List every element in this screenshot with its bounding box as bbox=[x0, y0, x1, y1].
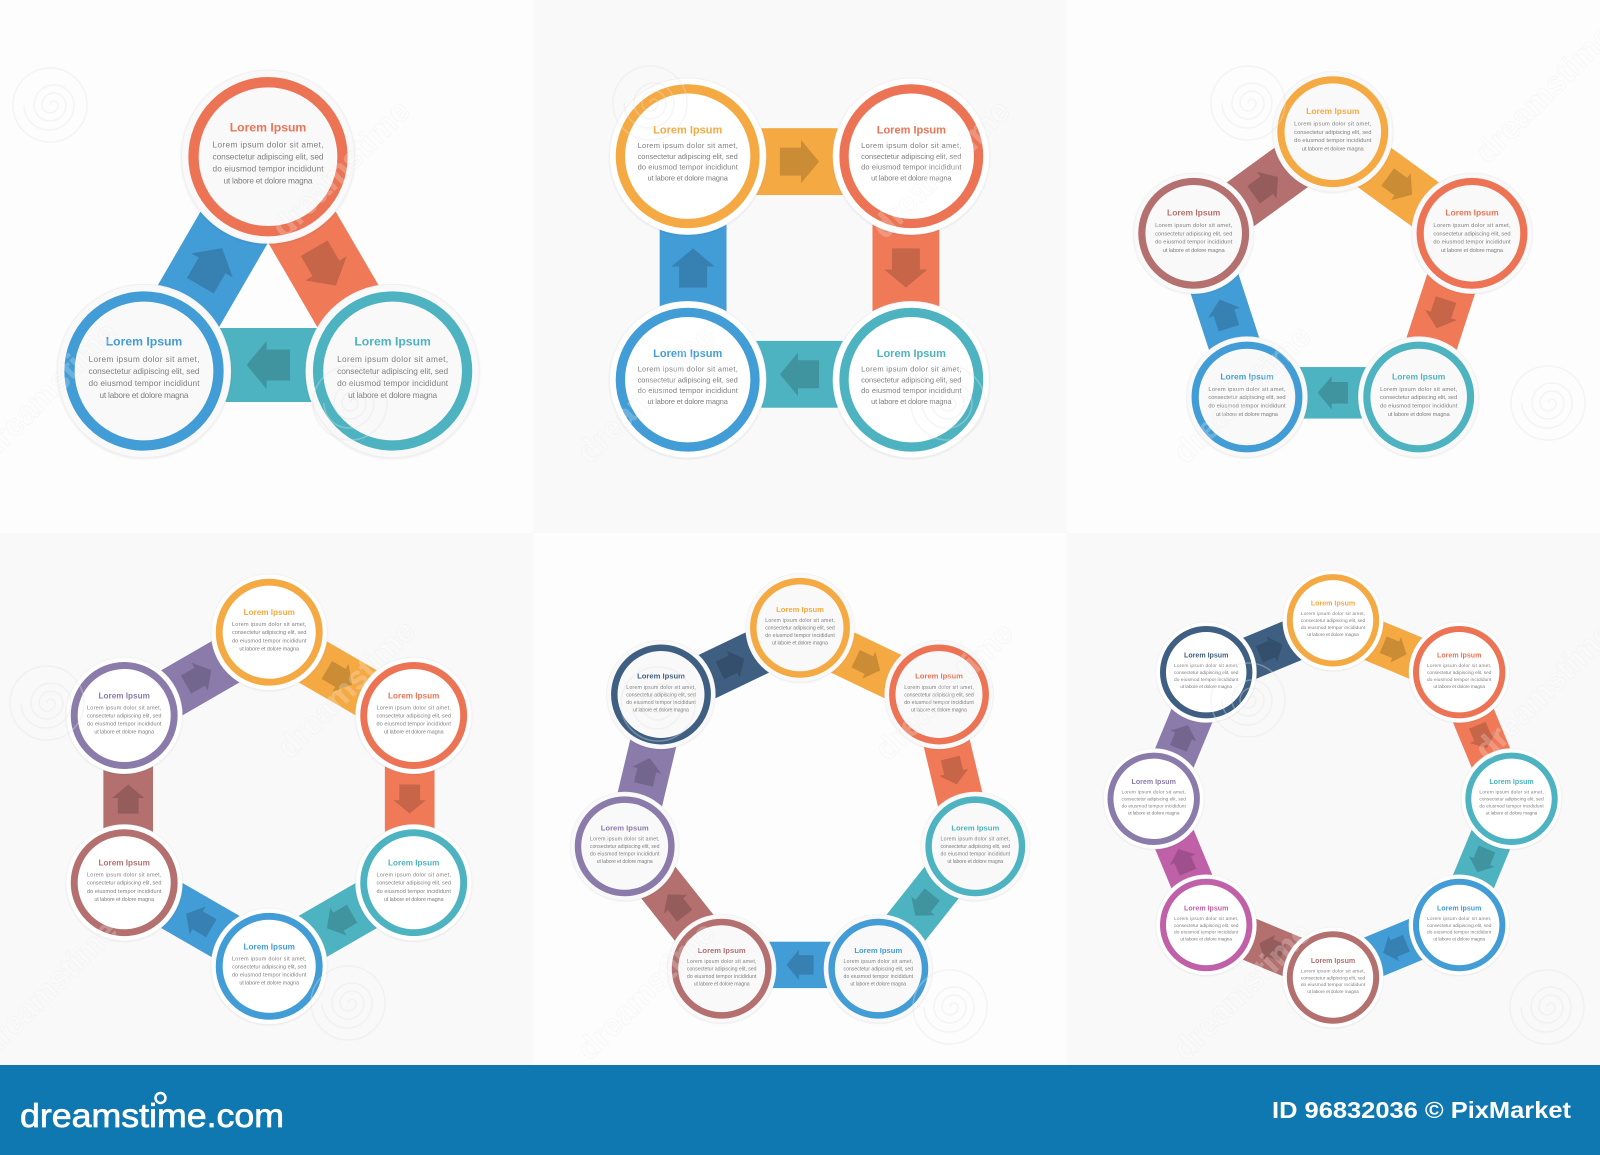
connector: purple band and arrow bbox=[143, 631, 255, 724]
step circle: red: Lorem ipsum dolor sit amet, bbox=[376, 705, 451, 711]
step circle: blue left: consectetur adipiscing elit, sed bbox=[88, 366, 200, 376]
step circle: red top: consectetur adipiscing elit, sed bbox=[212, 152, 324, 162]
connector: blue band and arrow bbox=[660, 200, 727, 336]
step circle: navy: Lorem Ipsum bbox=[637, 672, 685, 681]
step circle: magenta bbox=[1156, 875, 1256, 975]
step circle: orange: consectetur adipiscing elit, sed bbox=[232, 630, 306, 636]
connector: blue band and arrow bbox=[143, 874, 255, 968]
step circle: blue: do eiusmod tempor incididunt bbox=[232, 972, 307, 978]
connector: purple band and arrow bbox=[613, 720, 680, 822]
step circle: red: ut labore et dolore magna bbox=[871, 174, 952, 183]
step circle: blue: Lorem ipsum dolor sit amet, bbox=[232, 956, 307, 962]
step circle: purple bbox=[570, 792, 679, 901]
step circle: teal right: Lorem ipsum dolor sit amet, bbox=[337, 354, 448, 364]
watermark overlay: spirals and diagonal wordmarks: dreamstime bbox=[867, 614, 1020, 767]
step circle: orange: ut labore et dolore magna bbox=[239, 646, 300, 652]
step circle: mauve: Lorem ipsum dolor sit amet, bbox=[1155, 223, 1233, 229]
step circle: purple: Lorem ipsum dolor sit amet, bbox=[590, 837, 659, 843]
step circle: blue: ut labore et dolore magna bbox=[648, 397, 729, 406]
step circle: mauve: ut labore et dolore magna bbox=[1307, 989, 1359, 995]
step circle: teal: Lorem ipsum dolor sit amet, bbox=[376, 873, 451, 879]
step circle: red bbox=[1412, 173, 1532, 294]
watermark overlay: spirals and diagonal wordmarks: dreamstime bbox=[1165, 914, 1318, 1067]
connector: mauve band and arrow bbox=[103, 749, 153, 849]
step circle: teal: do eiusmod tempor incididunt bbox=[941, 852, 1011, 858]
step circle: red: consectetur adipiscing elit, sed bbox=[904, 692, 974, 698]
step circle: purple: Lorem Ipsum bbox=[601, 823, 649, 832]
step circle: purple: consectetur adipiscing elit, sed bbox=[1122, 797, 1186, 803]
step circle: blue: Lorem Ipsum bbox=[653, 348, 722, 360]
step circle: purple: do eiusmod tempor incididunt bbox=[590, 852, 660, 858]
step circle: red: do eiusmod tempor incididunt bbox=[1433, 240, 1511, 246]
step circle: orange: do eiusmod tempor incididunt bbox=[765, 633, 835, 639]
step circle: magenta: Lorem ipsum dolor sit amet, bbox=[1174, 916, 1238, 922]
step circle: orange: do eiusmod tempor incididunt bbox=[1294, 138, 1372, 144]
step circle: teal right: do eiusmod tempor incididunt bbox=[337, 378, 449, 388]
step circle: teal: consectetur adipiscing elit, sed bbox=[941, 844, 1010, 850]
connector: orange band and arrow bbox=[1346, 613, 1443, 686]
step circle: teal: Lorem Ipsum bbox=[1392, 371, 1446, 381]
step circle: mauve: ut labore et dolore magna bbox=[94, 897, 155, 903]
step circle: teal: consectetur adipiscing elit, sed bbox=[1380, 395, 1457, 401]
panel: five-step cycle bbox=[1067, 0, 1600, 533]
connector: orange band and arrow bbox=[815, 623, 920, 706]
step circle: mauve bbox=[66, 825, 182, 941]
step circle: orange: Lorem ipsum dolor sit amet, bbox=[765, 618, 835, 624]
step circle: teal: consectetur adipiscing elit, sed bbox=[376, 881, 451, 887]
step circle: orange: Lorem Ipsum bbox=[244, 608, 295, 617]
connector: red band and arrow bbox=[872, 200, 939, 336]
step circle: orange: ut labore et dolore magna bbox=[1307, 632, 1359, 638]
connector: navy band and arrow bbox=[680, 623, 785, 706]
step circle: blue: ut labore et dolore magna bbox=[1216, 412, 1279, 418]
step circle: teal bbox=[1461, 749, 1562, 849]
footer credit: image ID and author: ID 96832036 © PixMarket bbox=[1272, 1097, 1571, 1123]
connector: red band and arrow bbox=[1446, 688, 1519, 785]
step circle: mauve: do eiusmod tempor incididunt bbox=[87, 889, 162, 895]
panel: eight-step cycle bbox=[1067, 533, 1600, 1065]
step circle: teal: ut labore et dolore magna bbox=[947, 859, 1003, 865]
step circle: blue bbox=[609, 301, 766, 458]
step circle: blue: do eiusmod tempor incididunt bbox=[1208, 403, 1286, 409]
step circle: purple: do eiusmod tempor incididunt bbox=[87, 722, 162, 728]
step circle: mauve bbox=[1133, 173, 1254, 294]
step circle: orange: consectetur adipiscing elit, sed bbox=[1301, 618, 1366, 624]
step circle: teal: ut labore et dolore magna bbox=[1486, 810, 1538, 816]
step circle: purple: consectetur adipiscing elit, sed bbox=[87, 714, 161, 720]
step circle: blue left: ut labore et dolore magna bbox=[100, 390, 189, 400]
step circle: red: ut labore et dolore magna bbox=[384, 730, 444, 736]
step circle: blue: Lorem ipsum dolor sit amet, bbox=[844, 959, 913, 965]
step circle: teal: consectetur adipiscing elit, sed bbox=[1479, 797, 1544, 803]
step circle: blue bbox=[824, 914, 933, 1023]
connector: teal band and arrow bbox=[1281, 367, 1385, 419]
watermark overlay: spirals and diagonal wordmarks: dreamstime bbox=[269, 612, 422, 765]
step circle: teal right bbox=[306, 284, 479, 458]
connector: blue band and arrow bbox=[1184, 256, 1265, 371]
step circle: mauve: ut labore et dolore magna bbox=[1163, 248, 1225, 254]
step circle: blue left bbox=[57, 284, 231, 458]
step circle: red top: Lorem ipsum dolor sit amet, bbox=[212, 140, 324, 150]
connector: purple band and arrow bbox=[1147, 688, 1220, 785]
step circle: teal: do eiusmod tempor incididunt bbox=[376, 889, 451, 895]
step circle: blue left: Lorem Ipsum bbox=[106, 335, 182, 349]
step circle: teal right: Lorem Ipsum bbox=[354, 335, 431, 349]
step circle: navy: do eiusmod tempor incididunt bbox=[1174, 677, 1239, 683]
connector: orange band and arrow bbox=[1343, 134, 1457, 237]
step circle: orange: ut labore et dolore magna bbox=[648, 174, 729, 183]
step circle: orange: Lorem Ipsum bbox=[776, 605, 824, 614]
step circle: teal: do eiusmod tempor incididunt bbox=[861, 386, 962, 395]
step circle: teal bbox=[356, 825, 472, 941]
step circle: blue: ut labore et dolore magna bbox=[239, 980, 300, 986]
step circle: purple: do eiusmod tempor incididunt bbox=[1122, 803, 1187, 809]
step circle: purple: ut labore et dolore magna bbox=[1128, 810, 1180, 816]
step circle: blue: ut labore et dolore magna bbox=[850, 982, 906, 988]
step circle: orange: do eiusmod tempor incididunt bbox=[638, 163, 739, 172]
step circle: teal right: ut labore et dolore magna bbox=[348, 390, 437, 400]
panel: seven-step cycle bbox=[533, 533, 1067, 1065]
step circle: teal: Lorem ipsum dolor sit amet, bbox=[1479, 790, 1544, 796]
step circle: navy: ut labore et dolore magna bbox=[1180, 684, 1232, 690]
connector: mauve band and arrow bbox=[1208, 134, 1323, 237]
step circle: red: do eiusmod tempor incididunt bbox=[376, 722, 451, 728]
step circle: mauve: Lorem Ipsum bbox=[99, 859, 150, 868]
step circle: navy: consectetur adipiscing elit, sed bbox=[1174, 670, 1239, 676]
step circle: mauve: do eiusmod tempor incididunt bbox=[687, 974, 757, 980]
step circle: orange: Lorem ipsum dolor sit amet, bbox=[638, 141, 738, 150]
step circle: red top: ut labore et dolore magna bbox=[224, 176, 313, 186]
step circle: orange bbox=[211, 574, 327, 690]
step circle: navy bbox=[607, 640, 715, 749]
step circle: purple bbox=[1103, 749, 1204, 849]
connector: mauve band and arrow bbox=[629, 854, 724, 956]
step circle: red: consectetur adipiscing elit, sed bbox=[376, 714, 451, 720]
step circle: orange: ut labore et dolore magna bbox=[1302, 146, 1365, 152]
step circle: purple: consectetur adipiscing elit, sed bbox=[590, 844, 660, 850]
connector: magenta band and arrow bbox=[1147, 812, 1220, 909]
step circle: red: do eiusmod tempor incididunt bbox=[861, 163, 962, 172]
step circle: mauve: consectetur adipiscing elit, sed bbox=[87, 881, 161, 887]
step circle: purple: Lorem Ipsum bbox=[99, 692, 150, 701]
step circle: mauve: Lorem ipsum dolor sit amet, bbox=[687, 959, 756, 965]
step circle: red: consectetur adipiscing elit, sed bbox=[1427, 670, 1492, 676]
step circle: red: Lorem Ipsum bbox=[877, 124, 946, 136]
step circle: teal: do eiusmod tempor incididunt bbox=[1380, 403, 1458, 409]
step circle: teal bbox=[921, 792, 1030, 901]
step circle: blue: ut labore et dolore magna bbox=[1433, 937, 1485, 943]
step circle: blue: Lorem ipsum dolor sit amet, bbox=[638, 365, 738, 374]
step circle: mauve: Lorem ipsum dolor sit amet, bbox=[1301, 968, 1365, 974]
step circle: red: consectetur adipiscing elit, sed bbox=[861, 152, 961, 161]
step circle: orange: ut labore et dolore magna bbox=[772, 641, 828, 647]
step circle: blue: consectetur adipiscing elit, sed bbox=[1208, 395, 1286, 401]
step circle: mauve: do eiusmod tempor incididunt bbox=[1301, 982, 1366, 988]
footer bar bbox=[0, 1065, 1600, 1155]
step circle: orange: Lorem Ipsum bbox=[653, 124, 722, 136]
step circle: mauve: do eiusmod tempor incididunt bbox=[1155, 240, 1233, 246]
step circle: red: Lorem ipsum dolor sit amet, bbox=[1427, 663, 1491, 669]
step circle: magenta: ut labore et dolore magna bbox=[1180, 937, 1232, 943]
connector: orange band and arrow bbox=[283, 631, 395, 724]
connector: red band and arrow bbox=[920, 720, 987, 822]
step circle: orange: do eiusmod tempor incididunt bbox=[232, 638, 307, 644]
panel: six-step cycle bbox=[0, 533, 533, 1065]
step circle: teal bbox=[833, 301, 990, 458]
step circle: orange bbox=[1273, 71, 1393, 192]
step circle: blue bbox=[1187, 337, 1307, 457]
step circle: mauve: Lorem Ipsum bbox=[698, 946, 746, 955]
step circle: teal: ut labore et dolore magna bbox=[871, 397, 952, 406]
step circle: blue: consectetur adipiscing elit, sed bbox=[232, 964, 306, 970]
step circle: orange: Lorem ipsum dolor sit amet, bbox=[232, 622, 307, 628]
step circle: blue bbox=[211, 908, 327, 1024]
step circle: teal bbox=[1358, 337, 1479, 457]
connector: red band and arrow bbox=[1401, 256, 1482, 371]
step circle: orange: Lorem Ipsum bbox=[1306, 106, 1360, 116]
step circle: blue: do eiusmod tempor incididunt bbox=[1427, 930, 1492, 936]
step circle: teal: Lorem Ipsum bbox=[877, 348, 946, 360]
step circle: blue: consectetur adipiscing elit, sed bbox=[638, 375, 738, 384]
step circle: navy: Lorem Ipsum bbox=[1184, 653, 1228, 660]
step circle: mauve: ut labore et dolore magna bbox=[694, 982, 750, 988]
step circle: blue: Lorem ipsum dolor sit amet, bbox=[1427, 916, 1491, 922]
step circle: orange bbox=[1283, 570, 1383, 671]
step circle: blue: Lorem Ipsum bbox=[854, 946, 902, 955]
footer logo: dreamstime.com: dreamstime.com bbox=[20, 1097, 284, 1134]
step circle: purple: Lorem ipsum dolor sit amet, bbox=[87, 705, 162, 711]
connector: teal band and arrow bbox=[193, 328, 343, 402]
step circle: red: ut labore et dolore magna bbox=[911, 707, 967, 713]
step circle: purple: Lorem Ipsum bbox=[1132, 779, 1176, 786]
step circle: red: Lorem Ipsum bbox=[1445, 208, 1499, 218]
step circle: orange bbox=[609, 78, 766, 234]
connector: blue band and arrow bbox=[753, 942, 847, 988]
connector: teal band and arrow bbox=[1446, 812, 1519, 909]
step circle: red: Lorem ipsum dolor sit amet, bbox=[904, 685, 974, 691]
step circle: red: do eiusmod tempor incididunt bbox=[1427, 677, 1492, 683]
step circle: red: Lorem Ipsum bbox=[388, 692, 439, 701]
step circle: red bbox=[885, 640, 993, 749]
step circle: teal: Lorem Ipsum bbox=[951, 823, 999, 832]
connector: blue band and arrow bbox=[142, 183, 281, 350]
step circle: orange: do eiusmod tempor incididunt bbox=[1301, 625, 1366, 631]
connector: teal band and arrow bbox=[283, 874, 395, 968]
step circle: red top bbox=[181, 70, 355, 243]
step circle: teal: consectetur adipiscing elit, sed bbox=[861, 375, 961, 384]
connector: blue band and arrow bbox=[1346, 912, 1443, 985]
step circle: purple: ut labore et dolore magna bbox=[597, 859, 653, 865]
step circle: blue: do eiusmod tempor incididunt bbox=[638, 386, 739, 395]
panel: four-step cycle bbox=[533, 0, 1067, 533]
step circle: red bbox=[356, 657, 472, 774]
connector: red band and arrow bbox=[385, 749, 435, 849]
step circle: blue: Lorem Ipsum bbox=[1437, 905, 1481, 912]
connector: red band and arrow bbox=[255, 183, 395, 350]
step circle: orange: Lorem ipsum dolor sit amet, bbox=[1294, 121, 1372, 127]
step circle: purple: Lorem ipsum dolor sit amet, bbox=[1122, 790, 1186, 796]
step circle: teal: Lorem ipsum dolor sit amet, bbox=[1380, 387, 1458, 393]
step circle: blue: Lorem ipsum dolor sit amet, bbox=[1208, 387, 1286, 393]
connector: mauve band and arrow bbox=[1222, 912, 1319, 985]
step circle: blue bbox=[1409, 875, 1509, 975]
step circle: teal: Lorem ipsum dolor sit amet, bbox=[941, 837, 1010, 843]
watermark overlay: spirals and diagonal wordmarks: dreamstime bbox=[569, 317, 722, 470]
step circle: teal: ut labore et dolore magna bbox=[384, 897, 444, 903]
step circle: mauve: consectetur adipiscing elit, sed bbox=[687, 967, 757, 973]
step circle: teal right: consectetur adipiscing elit, sed bbox=[337, 366, 448, 376]
step circle: blue: Lorem Ipsum bbox=[1220, 371, 1274, 381]
step circle: orange: consectetur adipiscing elit, sed bbox=[765, 626, 835, 632]
step circle: mauve: consectetur adipiscing elit, sed bbox=[1155, 231, 1232, 237]
step circle: blue: Lorem Ipsum bbox=[244, 942, 295, 951]
step circle: orange: consectetur adipiscing elit, sed bbox=[638, 152, 738, 161]
step circle: red bbox=[1409, 622, 1509, 722]
watermark overlay: spirals and diagonal wordmarks: dreamstime bbox=[264, 92, 417, 245]
step circle: red: Lorem ipsum dolor sit amet, bbox=[861, 141, 961, 150]
step circle: red: ut labore et dolore magna bbox=[1433, 684, 1485, 690]
step circle: orange: Lorem ipsum dolor sit amet, bbox=[1301, 611, 1365, 617]
step circle: red: Lorem Ipsum bbox=[1437, 653, 1481, 660]
connector: teal band and arrow bbox=[732, 341, 867, 408]
step circle: orange: Lorem Ipsum bbox=[1311, 601, 1355, 608]
step circle: blue left: do eiusmod tempor incididunt bbox=[88, 378, 200, 388]
step circle: red: Lorem Ipsum bbox=[915, 672, 963, 681]
step circle: red: consectetur adipiscing elit, sed bbox=[1433, 231, 1511, 237]
step circle: navy: do eiusmod tempor incididunt bbox=[626, 700, 696, 706]
watermark overlay: spirals and diagonal wordmarks: dreamstime bbox=[569, 914, 722, 1067]
step circle: blue: consectetur adipiscing elit, sed bbox=[844, 967, 913, 973]
step circle: mauve bbox=[1283, 927, 1383, 1028]
step circle: navy: Lorem ipsum dolor sit amet, bbox=[1174, 663, 1238, 669]
step circle: blue: consectetur adipiscing elit, sed bbox=[1427, 923, 1492, 929]
step circle: purple: ut labore et dolore magna bbox=[94, 730, 155, 736]
step circle: mauve: Lorem Ipsum bbox=[1311, 958, 1355, 965]
panel: three-step cycle bbox=[0, 0, 533, 533]
step circle: blue: do eiusmod tempor incididunt bbox=[844, 974, 914, 980]
step circle: mauve bbox=[667, 914, 776, 1023]
step circle: orange bbox=[746, 574, 854, 682]
step circle: magenta: consectetur adipiscing elit, sed bbox=[1174, 923, 1239, 929]
step circle: magenta: do eiusmod tempor incididunt bbox=[1174, 930, 1239, 936]
step circle: navy: ut labore et dolore magna bbox=[633, 707, 689, 713]
step circle: red top: Lorem Ipsum bbox=[230, 120, 306, 134]
step circle: navy: Lorem ipsum dolor sit amet, bbox=[626, 685, 696, 691]
step circle: blue left: Lorem ipsum dolor sit amet, bbox=[88, 354, 200, 364]
step circle: red top: do eiusmod tempor incididunt bbox=[212, 164, 324, 174]
step circle: red bbox=[833, 78, 990, 234]
connector: teal band and arrow bbox=[876, 854, 971, 956]
connector: navy band and arrow bbox=[1222, 613, 1319, 686]
step circle: teal: Lorem Ipsum bbox=[1489, 779, 1534, 786]
step circle: red: ut labore et dolore magna bbox=[1441, 248, 1504, 254]
watermark overlay: spirals and diagonal wordmarks: dreamstime bbox=[1165, 317, 1318, 470]
connector: orange band and arrow bbox=[732, 128, 867, 195]
step circle: navy bbox=[1156, 622, 1256, 722]
step circle: teal: ut labore et dolore magna bbox=[1388, 412, 1450, 418]
step circle: mauve: Lorem ipsum dolor sit amet, bbox=[87, 873, 162, 879]
watermark overlay: spirals and diagonal wordmarks: dreamstime bbox=[864, 92, 1017, 245]
step circle: mauve: consectetur adipiscing elit, sed bbox=[1301, 975, 1366, 981]
step circle: navy: consectetur adipiscing elit, sed bbox=[626, 692, 696, 698]
step circle: teal: Lorem Ipsum bbox=[388, 859, 439, 868]
step circle: red: Lorem ipsum dolor sit amet, bbox=[1433, 223, 1511, 229]
step circle: red: do eiusmod tempor incididunt bbox=[904, 700, 974, 706]
step circle: mauve: Lorem Ipsum bbox=[1167, 208, 1221, 218]
step circle: purple bbox=[66, 657, 182, 774]
step circle: teal: do eiusmod tempor incididunt bbox=[1479, 803, 1544, 809]
step circle: orange: consectetur adipiscing elit, sed bbox=[1294, 130, 1371, 136]
step circle: magenta: Lorem Ipsum bbox=[1184, 905, 1228, 912]
step circle: teal: Lorem ipsum dolor sit amet, bbox=[861, 365, 961, 374]
